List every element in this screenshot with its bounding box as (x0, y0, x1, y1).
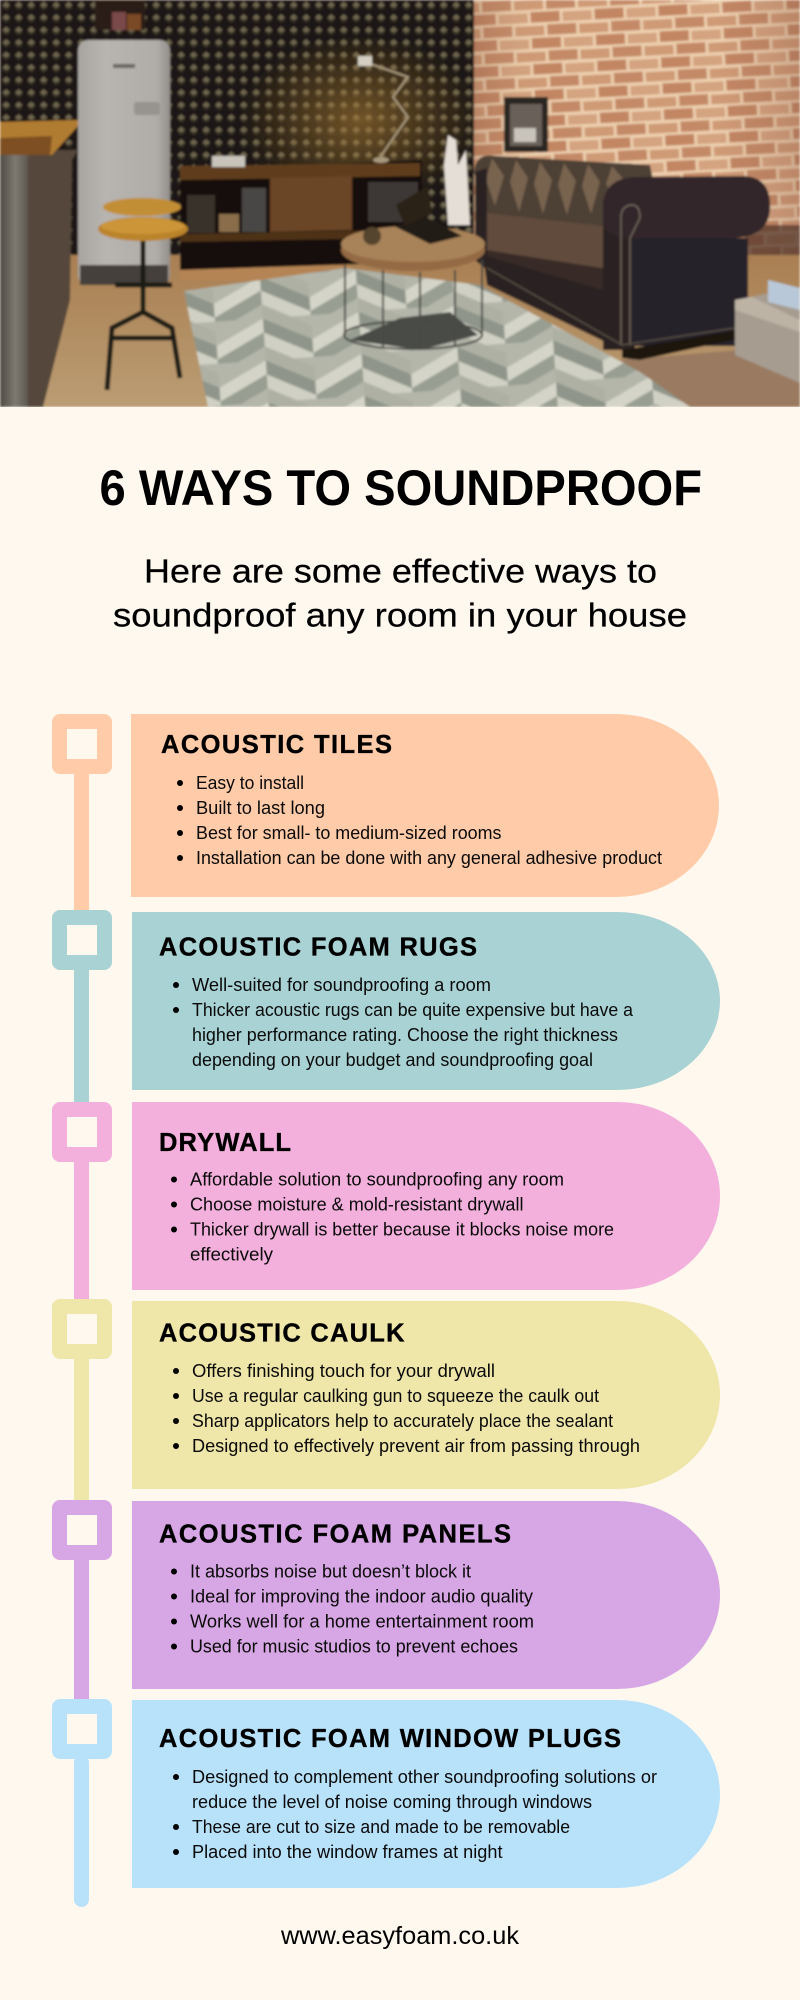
lamp (358, 56, 408, 163)
basket with box (735, 280, 800, 383)
bullet list: drywall: Choose moisture & mold-resistant drywall (190, 1194, 524, 1214)
footer url: www.easyfoam.co.uk (280, 1922, 519, 1950)
bullet list: drywall: effectively (190, 1244, 273, 1264)
title: 6 WAYS TO SOUNDPROOF (100, 460, 702, 516)
bullet list: acoustic foam panels (171, 1562, 534, 1656)
heading: drywall: DRYWALL (159, 1129, 291, 1157)
bullet list: acoustic tiles (177, 773, 662, 868)
brick wall (472, 0, 800, 257)
bullet list: acoustic caulk: Offers finishing touch for your drywall (192, 1361, 495, 1381)
subtitle (113, 554, 687, 634)
bullet list: acoustic foam rugs: higher performance rating. Choose the right thickness (192, 1025, 618, 1045)
panel: acoustic caulk (132, 1301, 720, 1489)
bullet list: acoustic foam window plugs: These are cut to size and made to be removable (192, 1817, 570, 1837)
bullet list: acoustic foam window plugs (173, 1767, 657, 1862)
sideboard (180, 156, 422, 270)
bullet list: drywall: Thicker drywall is better because it blocks noise more (190, 1220, 614, 1240)
bullet list: acoustic foam rugs: Well-suited for soundproofing a room (192, 975, 491, 995)
panel: acoustic foam rugs (132, 912, 720, 1090)
timeline marker: step 3 (52, 1102, 112, 1301)
subtitle: Here are some effective ways to (144, 554, 657, 590)
timeline marker: step 4 (52, 1299, 112, 1502)
bullet list: drywall: Affordable solution to soundproofing any room (190, 1170, 564, 1190)
floor (0, 255, 800, 407)
heading: acoustic foam panels: ACOUSTIC FOAM PANELS (159, 1520, 511, 1548)
bullet list: acoustic caulk: Designed to effectively prevent air from passing through (192, 1436, 640, 1456)
fridge (78, 40, 170, 285)
dark acoustic wall (0, 0, 476, 257)
bullet list: acoustic foam rugs: depending on your budget and soundproofing goal (192, 1050, 593, 1070)
timeline marker: step 6 (52, 1699, 112, 1907)
rug (184, 268, 690, 407)
lamp glow on wall (248, 40, 470, 189)
bullet list: drywall (171, 1170, 614, 1264)
counter (0, 120, 78, 407)
photo: living room with soundproofed wall (0, 0, 800, 407)
panel: drywall (132, 1102, 720, 1290)
panel: acoustic foam panels (132, 1501, 720, 1689)
heading: acoustic tiles: ACOUSTIC TILES (161, 731, 392, 759)
bullet list: acoustic foam window plugs: Placed into the window frames at night (192, 1842, 502, 1862)
timeline marker: step 5 (52, 1500, 112, 1701)
bullet list: acoustic foam panels: Ideal for improving the indoor audio quality (190, 1586, 533, 1606)
shelf items top (95, 0, 145, 30)
bullet list: acoustic foam window plugs: reduce the level of noise coming through windows (192, 1792, 592, 1812)
panel: acoustic tiles (131, 714, 719, 897)
timeline marker: step 2 (52, 910, 112, 1104)
bullet list: acoustic caulk: Use a regular caulking gun to squeeze the caulk out (192, 1386, 599, 1406)
timeline marker: step 1 (52, 714, 112, 912)
bullet list: acoustic tiles: Easy to install (196, 773, 304, 793)
heading: acoustic foam rugs: ACOUSTIC FOAM RUGS (159, 934, 477, 962)
chesterfield sofa (474, 155, 770, 360)
bar stool (98, 198, 188, 390)
bullet list: acoustic foam window plugs: Designed to complement other soundproofing solutions or (192, 1767, 657, 1787)
bullet list: acoustic tiles: Built to last long (196, 798, 325, 818)
bullet list: acoustic foam panels: Used for music studios to prevent echoes (190, 1636, 518, 1656)
bullet list: acoustic foam rugs: Thicker acoustic rugs can be quite expensive but have a (192, 1000, 634, 1020)
panel: acoustic foam window plugs (132, 1700, 720, 1888)
heading: acoustic caulk: ACOUSTIC CAULK (159, 1320, 405, 1348)
subtitle: soundproof any room in your house (113, 598, 687, 634)
bullet list: acoustic tiles: Best for small- to medium-sized rooms (196, 823, 502, 843)
bullet list: acoustic caulk (173, 1361, 640, 1456)
white sculpture (444, 135, 470, 225)
round side table (341, 186, 485, 350)
bullet list: acoustic caulk: Sharp applicators help to accurately place the sealant (192, 1411, 613, 1431)
bullet list: acoustic foam panels: Works well for a home entertainment room (190, 1612, 534, 1632)
bullet list: acoustic foam panels: It absorbs noise but doesn’t block it (190, 1562, 471, 1582)
bullet list: acoustic foam rugs (173, 975, 634, 1070)
framed picture (504, 97, 548, 152)
bullet list: acoustic tiles: Installation can be done with any general adhesive product (196, 848, 662, 868)
heading: acoustic foam window plugs: ACOUSTIC FOAM WINDOW PLUGS (159, 1725, 621, 1753)
